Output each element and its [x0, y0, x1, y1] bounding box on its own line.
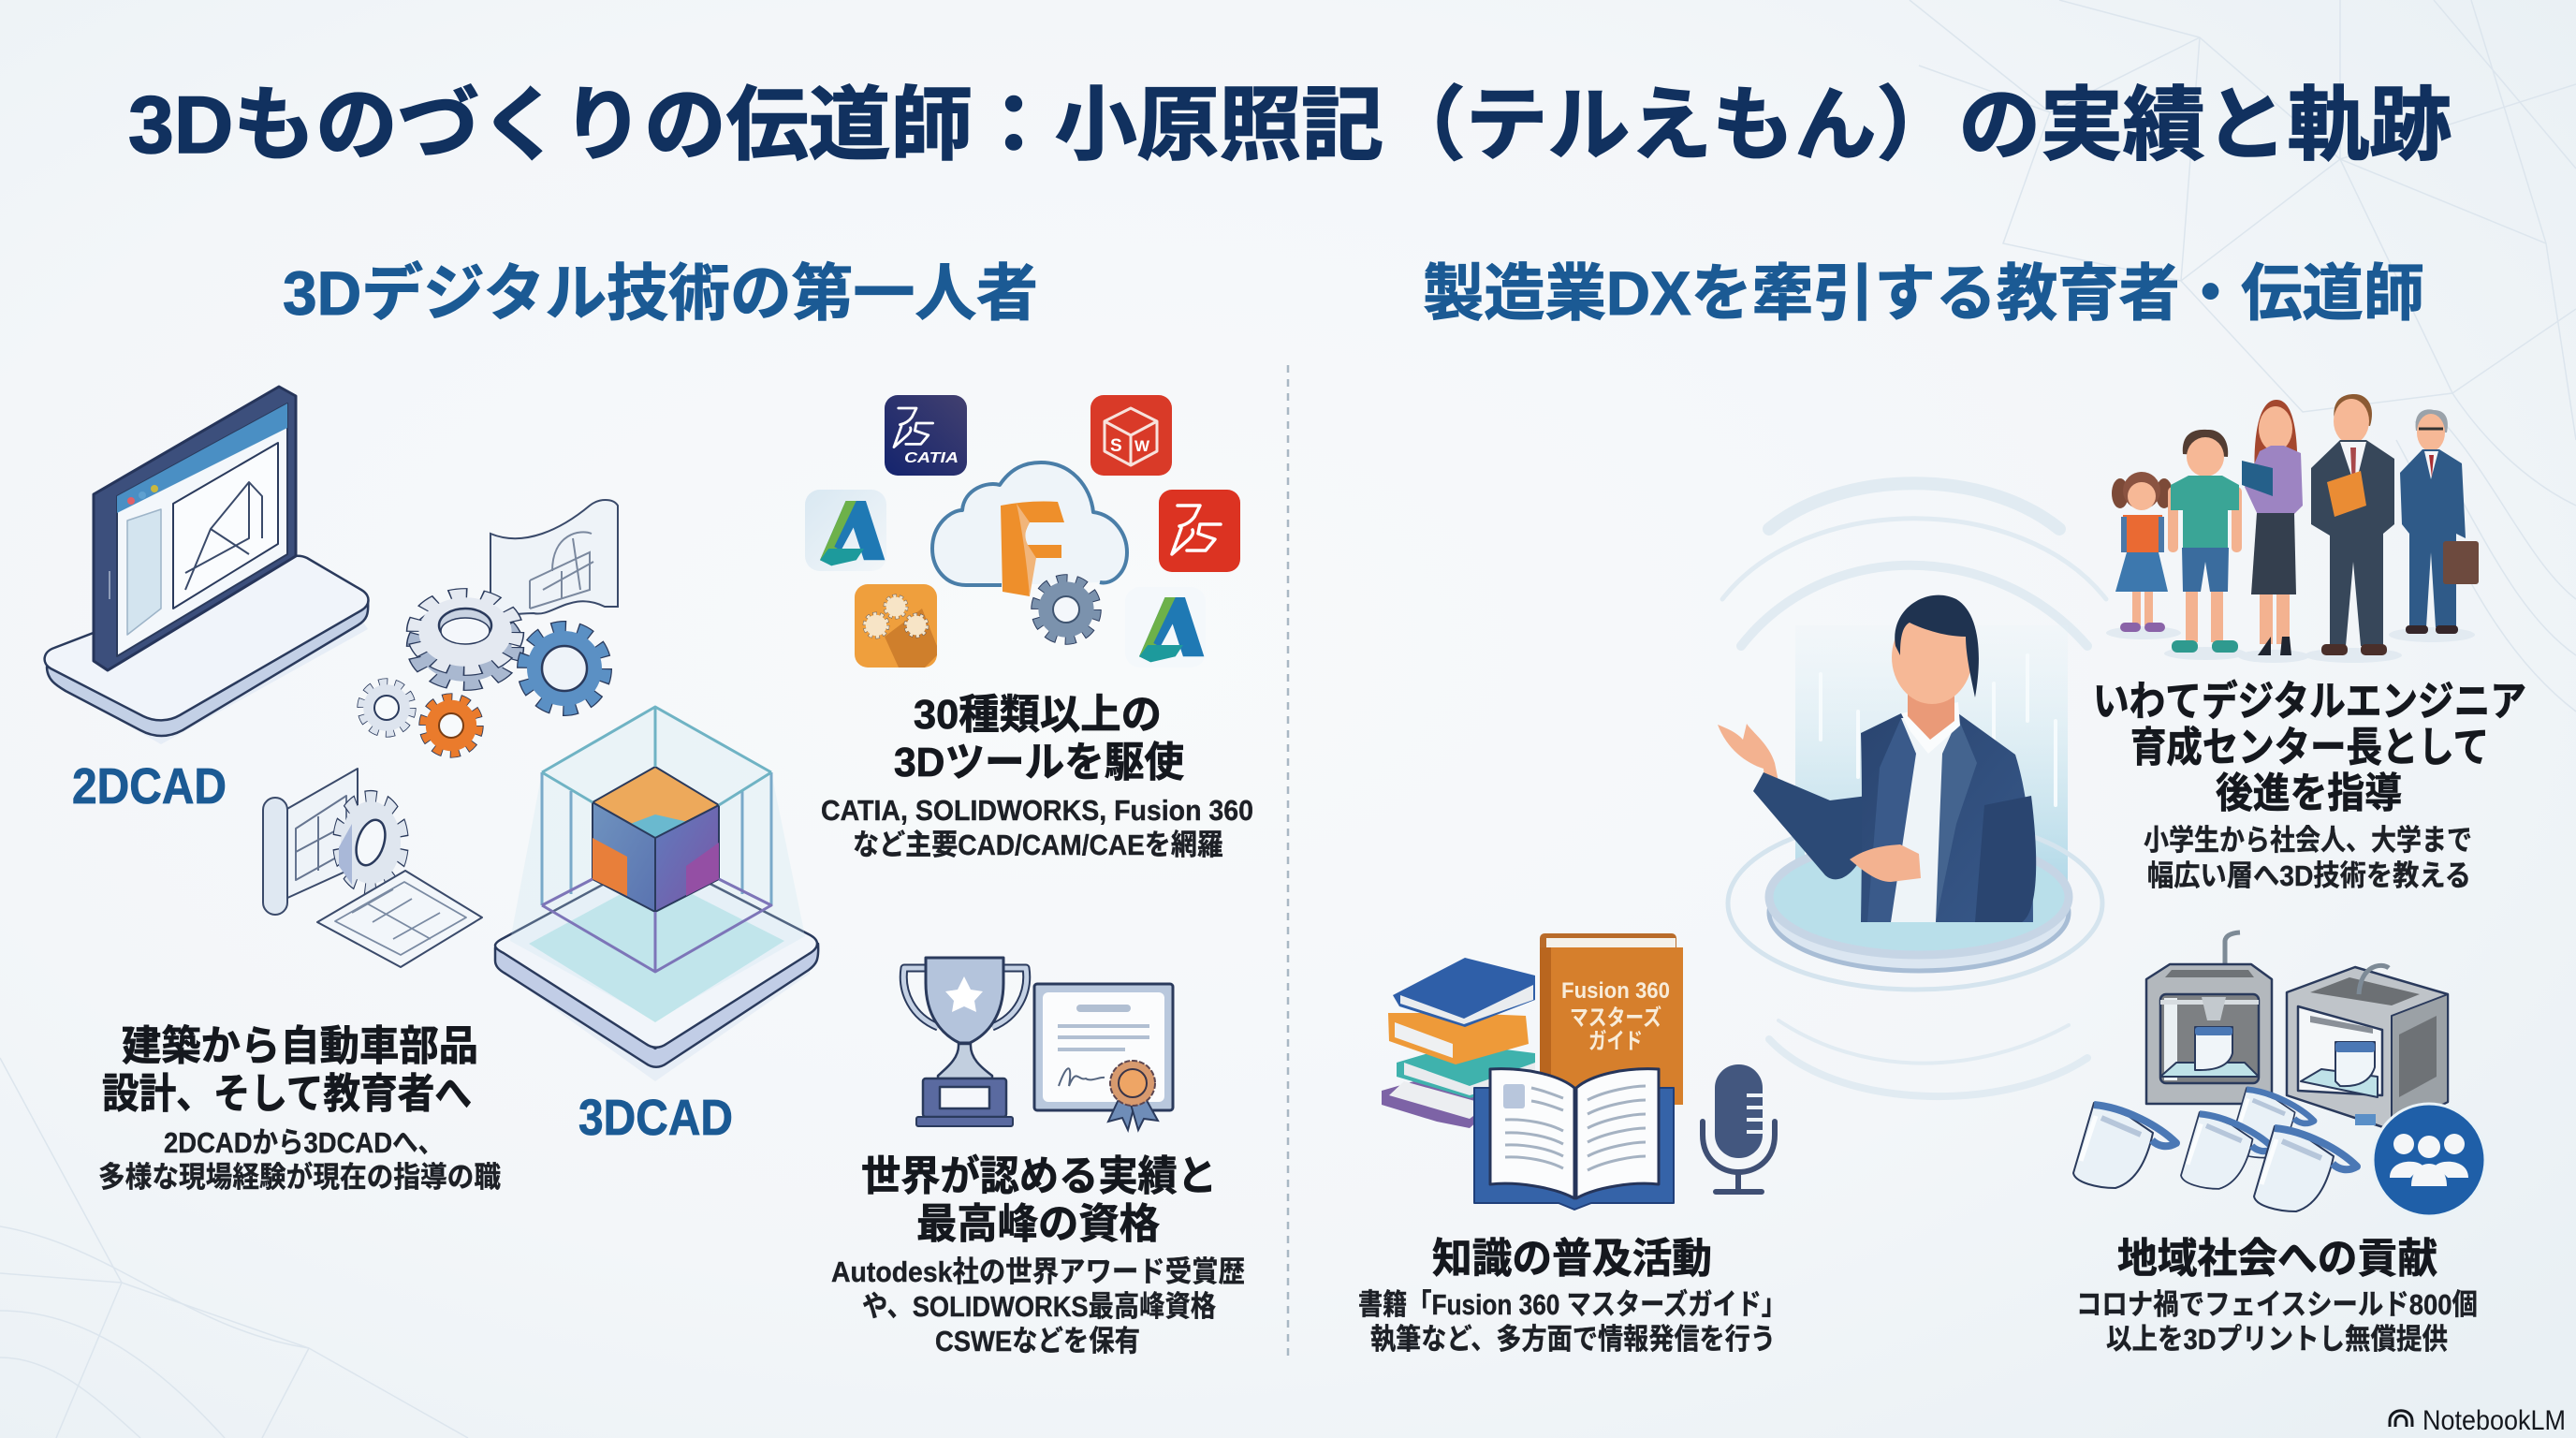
- text block: center director: 小学生から社会人、大学まで: [2144, 824, 2472, 857]
- icon: blue gear: [523, 627, 606, 710]
- icon: grey gear: [414, 594, 517, 684]
- person: presenter: [1718, 595, 2036, 922]
- icon: orange gears: [855, 584, 937, 668]
- icon: 2D CAD laptop: [45, 387, 368, 744]
- text block: career: 多様な現場経験が現在の指導の職: [98, 1161, 501, 1194]
- text block: knowledge: 知識の普及活動: [1432, 1236, 1712, 1282]
- heading: right section: 製造業DXを牽引する教育者・伝道師: [1423, 258, 2424, 328]
- text block: community: 以上を3Dプリントし無償提供: [2106, 1323, 2448, 1356]
- heading: left section: 3Dデジタル技術の第一人者: [283, 258, 1038, 328]
- platform rings: [1728, 817, 2102, 990]
- title: 3Dものづくりの伝道師：小原照記（テルえもん）の実績と軌跡: [128, 81, 2452, 170]
- label: 3DCAD: 3DCAD: [578, 1090, 733, 1146]
- illustration: 3D printers and face shields: [2073, 932, 2485, 1216]
- icon: stacked books: [1382, 958, 1535, 1128]
- icon: blueprint sheet: [490, 500, 618, 615]
- icon: CATIA: CATIA: [904, 450, 959, 466]
- text block: knowledge: 執筆など、多方面で情報発信を行う: [1370, 1323, 1776, 1356]
- icon: orange gear: [423, 697, 479, 754]
- text block: community: 地域社会への貢献: [2117, 1236, 2437, 1282]
- icon: certificate: [1034, 984, 1173, 1130]
- panel: trophy and certificate: [903, 958, 1173, 1130]
- illustration: learners of all ages: [2106, 394, 2479, 663]
- icon: SolidWorks cube: W: [1134, 437, 1150, 455]
- text block: awards: や、SOLIDWORKS最高峰資格: [862, 1290, 1216, 1323]
- icon: tilted gear: [333, 791, 408, 894]
- text block: tools: CATIA, SOLIDWORKS, Fusion 360: [821, 794, 1253, 827]
- person: girl: [2112, 472, 2173, 632]
- icon: 3D CAD platform: [495, 707, 818, 1081]
- icon: Autodesk right: [1125, 587, 1206, 668]
- text block: community: コロナ禍でフェイスシールド800個: [2076, 1288, 2478, 1321]
- icon: face shields: [2073, 1088, 2357, 1211]
- icon: CATIA: [885, 395, 967, 476]
- text block: center director: [2093, 679, 2526, 892]
- text block: awards: Autodesk社の世界アワード受賞歴: [831, 1255, 1245, 1288]
- icon: microphone: [1703, 1064, 1775, 1192]
- icon: SolidWorks cube: S: [1110, 436, 1122, 456]
- icon: open book: [1474, 1069, 1674, 1210]
- icon: small grey gear: [361, 682, 412, 733]
- icon: cloud: [932, 462, 1127, 585]
- floor shadows: [2106, 626, 2475, 663]
- person: boy: [2168, 430, 2242, 653]
- icon: transparent wire cube: [542, 707, 771, 972]
- person: woman: [2242, 400, 2303, 655]
- text block: knowledge: 書籍「Fusion 360 マスターズガイド」: [1358, 1288, 1786, 1321]
- text block: career: 2DCADから3DCADへ、: [164, 1126, 444, 1159]
- text block: center director: 後進を指導: [2216, 770, 2402, 816]
- icon: rolled plan: [263, 769, 358, 915]
- icon: left 3D printer: [2146, 932, 2272, 1104]
- panel: CAD career illustration: [45, 387, 818, 1081]
- decorative arcs: [1722, 483, 2106, 1096]
- hologram column: [1795, 625, 2068, 906]
- illustration: presenter on hologram: [1718, 483, 2106, 1096]
- icon: Fusion F: [1001, 502, 1064, 596]
- text block: center director: いわてデジタルエンジニア: [2093, 679, 2526, 725]
- person: older man with briefcase: [2400, 409, 2479, 634]
- person: man with folder: [2311, 394, 2394, 655]
- text block: career: 設計、そして教育者へ: [102, 1071, 472, 1117]
- icon: Autodesk left: [805, 490, 886, 571]
- icon: Fusion 360 book: マスターズ: [1570, 1005, 1661, 1031]
- icon: Fusion 360 book: Fusion 360: [1561, 978, 1670, 1004]
- icon: community badge: [2373, 1104, 2485, 1216]
- text block: awards: [831, 1153, 1245, 1357]
- icon: floor plan: [317, 871, 482, 967]
- text block: career: [98, 1023, 501, 1194]
- text block: knowledge: [1358, 1236, 1786, 1356]
- text block: tools: など主要CAD/CAM/CAEを網羅: [853, 829, 1223, 861]
- text block: tools: 30種類以上の: [914, 692, 1162, 738]
- text block: center director: 育成センター長として: [2130, 725, 2489, 770]
- icon: trophy: [903, 958, 1027, 1126]
- illustration: books and microphone: [1382, 933, 1775, 1210]
- text block: awards: CSWEなどを保有: [935, 1325, 1140, 1357]
- text block: career: 建築から自動車部品: [122, 1023, 478, 1069]
- icon: inner colored cube: [593, 767, 719, 912]
- text block: awards: 世界が認める実績と: [861, 1153, 1217, 1199]
- text block: awards: 最高峰の資格: [916, 1201, 1160, 1247]
- icon: Fusion 360 book: [1540, 933, 1683, 1105]
- text block: center director: 幅広い層へ3D技術を教える: [2147, 859, 2471, 892]
- label: 2DCAD: 2DCAD: [72, 758, 227, 814]
- icon: Fusion 360 book: ガイド: [1588, 1029, 1643, 1054]
- icon: settings gear: [1035, 579, 1097, 640]
- text block: tools: 3Dツールを駆使: [894, 740, 1184, 785]
- text block: community: [2076, 1236, 2478, 1356]
- icon: right 3D printer: [2287, 965, 2448, 1130]
- text block: tools: [821, 692, 1253, 861]
- icon: Dassault 3DS: [1159, 490, 1240, 572]
- icon: SolidWorks cube: [1090, 395, 1172, 476]
- panel: 3D tool icons: [805, 395, 1240, 668]
